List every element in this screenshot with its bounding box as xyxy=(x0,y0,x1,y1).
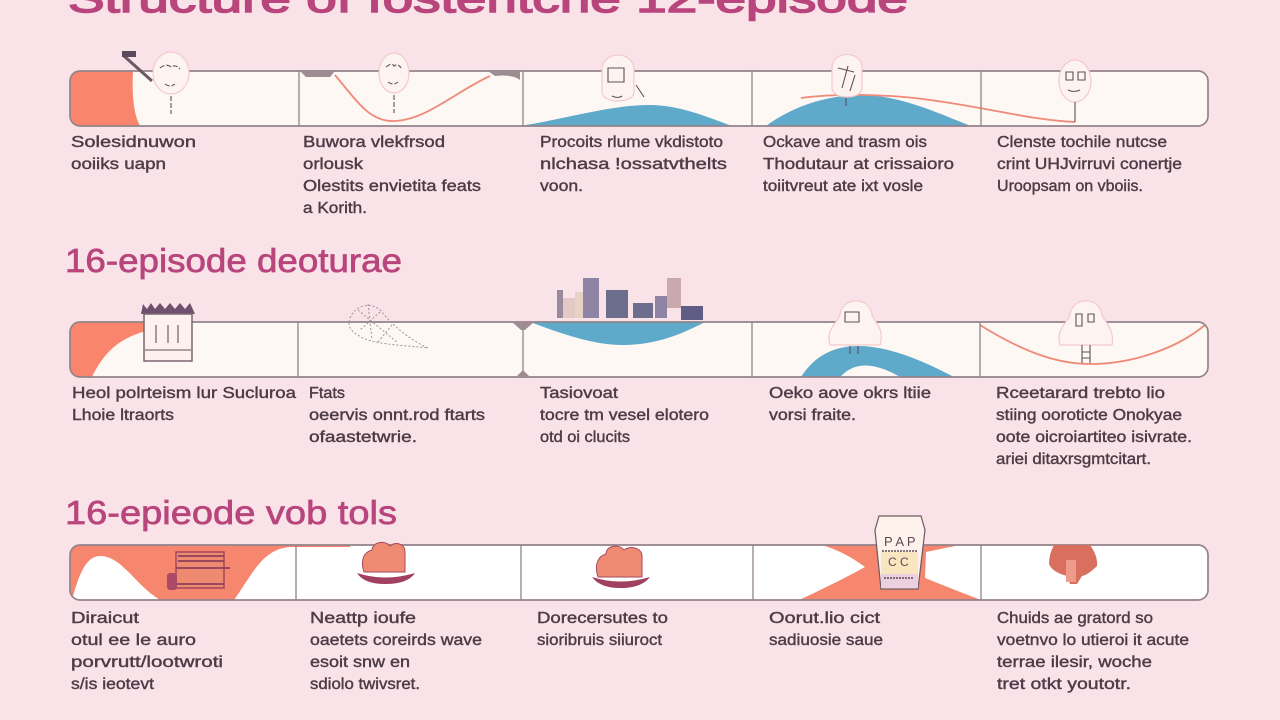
segment: orange hourglass xyxy=(799,545,981,600)
icon: ledger building xyxy=(141,303,195,361)
captions: row two: oote oicroiartiteo isivrate. xyxy=(996,429,1192,446)
icon: stacked book xyxy=(167,552,230,590)
icon: figure three xyxy=(602,55,644,101)
icon: sketched leaf xyxy=(349,304,428,348)
captions: row three: sdiolo twivsret. xyxy=(310,676,420,693)
segment: red dip curve xyxy=(335,75,490,121)
captions: row two xyxy=(72,385,1192,468)
captions: row three: porvrutt/lootwroti xyxy=(71,654,223,671)
icon: note jar: P A P xyxy=(884,534,916,549)
captions: row one: Olestits envietita feats xyxy=(303,178,481,195)
captions: row one: Clenste tochile nutcse xyxy=(997,134,1167,151)
captions: row one: a Korith. xyxy=(303,200,367,217)
captions: row one: Solesidnuwon xyxy=(71,134,196,151)
captions: row one: Procoits rlume vkdistoto xyxy=(540,134,723,151)
panel: vob tools timeline xyxy=(70,545,1208,600)
icon: city skyline xyxy=(557,278,703,320)
captions: row two: stiing ooroticte Onokyae xyxy=(996,407,1182,424)
heading: 16-epieode vob tols: 16-epieode vob tols xyxy=(65,494,397,531)
captions: row one: ooiiks uapn xyxy=(71,156,166,173)
segment: red falling line xyxy=(801,95,1075,122)
captions: row three xyxy=(71,610,1189,693)
icon: red funnel xyxy=(1049,545,1097,584)
panel: 12-episode timeline xyxy=(70,71,1208,126)
icon: note jar: C C xyxy=(888,555,909,569)
captions: row two: tocre tm vesel elotero xyxy=(540,407,709,424)
captions: row one: orlousk xyxy=(303,156,363,173)
captions: row three: sioribruis siiuroct xyxy=(537,632,663,649)
captions: row two: Ftats xyxy=(309,385,345,402)
captions: row three: tret otkt youtotr. xyxy=(997,676,1131,693)
icon: figure four xyxy=(832,54,862,106)
heading: 16-episode deoturae: 16-episode deoturae xyxy=(65,242,402,279)
icon: cake two xyxy=(592,546,650,588)
captions: row three: Dorecersutes to xyxy=(537,610,668,627)
segment: orange opening xyxy=(70,71,140,126)
icon: figure one xyxy=(153,52,189,114)
icon: pen xyxy=(122,51,152,81)
captions: row two: Lhoie ltraorts xyxy=(72,407,174,424)
captions: row two: oeervis onnt.rod ftarts xyxy=(309,407,485,424)
captions: row two: ariei ditaxrsgmtcitart. xyxy=(996,451,1151,468)
captions: row one: Thodutaur at crissaioro xyxy=(763,156,954,173)
captions: row three: otul ee le auro xyxy=(71,632,196,649)
captions: row two: ofaastetwrie. xyxy=(309,429,417,446)
icon: note jar xyxy=(875,516,925,589)
captions: row two: Tasiovoat xyxy=(540,385,619,402)
captions: row two: Oeko aove okrs ltiie xyxy=(769,385,931,402)
captions: row three: Neattp ioufe xyxy=(310,610,416,627)
captions: row one: crint UHJvirruvi conertje xyxy=(997,156,1182,173)
icon: figure two xyxy=(379,53,409,113)
icon: figure six xyxy=(829,301,881,354)
icon: cake one xyxy=(357,542,415,584)
captions: row one: nlchasa !ossatvthelts xyxy=(540,156,727,173)
captions: row three: oaetets coreirds wave xyxy=(310,632,482,649)
segment: blue arch xyxy=(801,346,954,377)
segment: blue lens xyxy=(530,322,705,345)
segment: blue hill three xyxy=(520,105,732,126)
captions: row three: voetnvo lo utieroi it acute xyxy=(997,632,1189,649)
captions: row three: sadiuosie saue xyxy=(769,632,883,649)
icon: figure seven xyxy=(1059,301,1113,363)
captions: row two: Rceetarard trebto lio xyxy=(996,385,1165,402)
captions: row three: esoit snw en xyxy=(310,654,410,671)
captions: row one xyxy=(71,134,1182,217)
captions: row two: Heol polrteism lur Sucluroa xyxy=(72,385,296,402)
captions: row one: voon. xyxy=(540,178,583,195)
segment: orange wave xyxy=(70,545,350,600)
segment: orange opening xyxy=(70,322,146,377)
captions: row three: Chuids ae gratord so xyxy=(997,610,1153,627)
captions: row three: s/is ieotevt xyxy=(71,676,155,693)
captions: row two: vorsi fraite. xyxy=(769,407,856,424)
segment: red smile curve xyxy=(980,325,1205,364)
captions: row one: toiitvreut ate ixt vosle xyxy=(763,178,923,195)
captions: row three: Diraicut xyxy=(71,610,140,627)
captions: row one: Ockave and trasm ois xyxy=(763,134,927,151)
panel: 16-episode timeline xyxy=(70,322,1208,377)
segment: blue hill four xyxy=(766,95,971,126)
captions: row three: Oorut.lio cict xyxy=(769,610,881,627)
captions: row three: terrae ilesir, woche xyxy=(997,654,1152,671)
icon: figure five xyxy=(1059,60,1091,122)
captions: row one: Buwora vlekfrsod xyxy=(303,134,445,151)
captions: row two: otd oi clucits xyxy=(540,429,630,446)
captions: row one: Uroopsam on vboiis. xyxy=(997,178,1143,195)
